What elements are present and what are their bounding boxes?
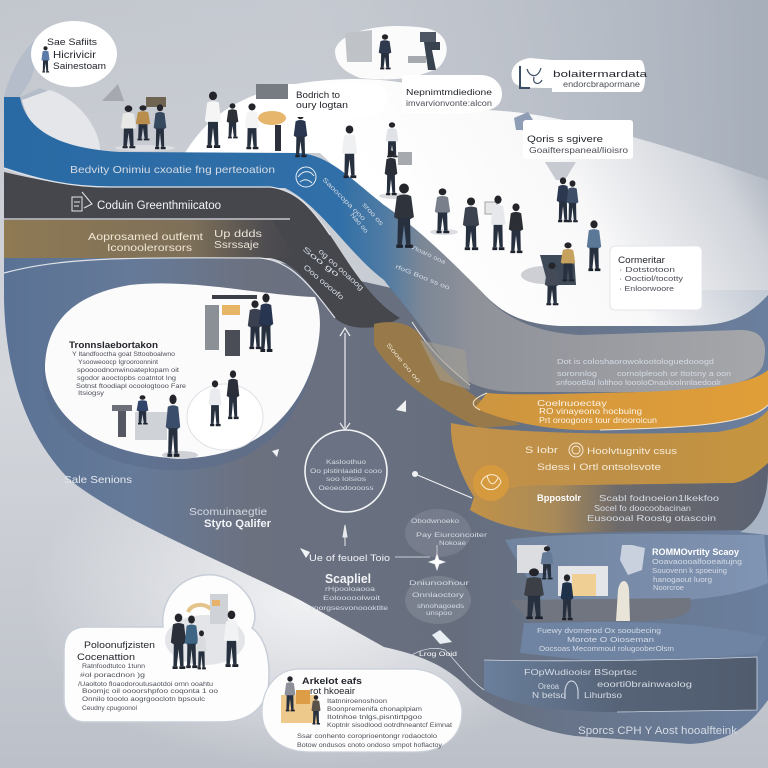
callout: services: Goaifterspaneal/lioisro	[529, 145, 628, 155]
orange label row: Hoolvtugnitv csus	[587, 446, 678, 456]
brown diagonal stream	[374, 322, 520, 428]
label: style qualifier	[189, 507, 272, 530]
diagonal blue text	[321, 176, 385, 235]
group: fuel label and scapliel: rHpooloaooa	[325, 586, 376, 593]
label: sale sessions: Sale Senions	[64, 474, 132, 486]
grey band text: snfoooBlal lolthoo loooloOnaoloolnnlaedoolr	[556, 380, 722, 387]
body text: Onnilo tooolo aogrgooclotn bpsoulc	[82, 696, 206, 703]
callout: balance data: endorcbrapormane	[563, 80, 641, 89]
orange band two	[451, 410, 768, 497]
grey swoosh behind top bubble	[4, 40, 55, 146]
team group two	[205, 84, 307, 157]
orange band one: Prt oroogoors tour dnooroicun	[539, 415, 657, 425]
cloud cluster labels: Pay Eiurconcoiter	[416, 532, 488, 539]
orange slate band three: Scabl fodnoeion1lkekfoo	[599, 493, 719, 503]
orange label row: S Iobr	[525, 445, 558, 455]
diagonal blue text: Nao oo	[348, 212, 370, 235]
lower right scene panel	[505, 534, 768, 622]
circle callout	[305, 430, 387, 512]
group: fuel label and scapliel	[300, 548, 390, 612]
cloud cluster labels: unspoo	[426, 610, 452, 617]
panel: commentar list	[610, 246, 702, 310]
panel: procurement cooperation: Cocenattion	[77, 652, 135, 663]
band five	[520, 622, 767, 660]
bottom band label: Sporcs CPH Y Aost hooalfteink	[578, 725, 738, 737]
icon: stethoscope	[520, 66, 542, 88]
label: style qualifier: Scomuinaegtie	[189, 507, 268, 518]
band: grey and blue stream	[4, 97, 765, 392]
icon: orange globe	[473, 465, 509, 501]
group: fuel label and scapliel: Scapliel	[325, 572, 371, 586]
body text	[78, 663, 218, 712]
band: brown stream: Ssrssaje	[214, 240, 259, 251]
callout: study login	[288, 84, 387, 117]
diagonal blue text: Saoocopa ooo	[321, 176, 367, 223]
panel: commentar list: · Dotstotoon	[619, 267, 675, 274]
body text: #ol poracdnon )g	[80, 672, 145, 679]
heading: Tronnslaebortakon	[69, 340, 158, 351]
small pointer: diagonal pin	[396, 400, 406, 412]
big white bubble panel	[43, 283, 320, 470]
body text: /Uaoltoto floaodoroutusaotdoi ornn ooahtu	[78, 681, 213, 688]
band: dark stream	[4, 172, 400, 328]
cloud cluster labels: Obodwnoeko	[411, 518, 459, 525]
callout: study login: oury logtan	[296, 100, 348, 110]
team group four	[521, 177, 601, 305]
cloud cluster labels: Dniunoohour	[409, 580, 470, 587]
lower right scene panel: hanogaout luorg	[653, 575, 712, 584]
band six	[484, 657, 757, 712]
band six: Oreoa	[538, 682, 560, 691]
diagonal dark text: Soo go	[301, 244, 341, 279]
orange label row: Sdess I Ortl ontsolsvote	[537, 462, 661, 472]
band six: Lihurbso	[584, 691, 623, 700]
small pointer: orange leader	[412, 472, 472, 498]
brown band labels: Aoprosamed outfemt	[88, 232, 203, 243]
illustration: boxes	[281, 676, 320, 724]
separators	[4, 168, 335, 318]
body text: Itsiogsy	[78, 390, 105, 397]
band six: FOpWudiooisr BSoprtsc	[524, 668, 637, 677]
callout: imperative: Nepnimtmdiedione	[406, 87, 492, 97]
band six: N betsd	[532, 691, 566, 700]
panel: commentar list: · Ooctiol/tocotty	[619, 276, 684, 283]
body text: Ceudny cpugoonol	[82, 705, 138, 712]
band five: Fuewy dvomerod Ox sooubecing	[537, 626, 661, 635]
diagonal dark text	[301, 244, 366, 302]
panel: architecture: rot hkoeair	[310, 686, 355, 696]
slate main body	[4, 258, 768, 744]
callout: study login: Bodrich to	[296, 90, 340, 100]
cloud cluster labels: Onnlaoctory	[412, 592, 465, 599]
icon: cloud map	[432, 630, 452, 644]
label: style qualifier: Styto Qalifer	[204, 518, 272, 530]
body text: Ratnfoodtutco 1tunn	[82, 663, 145, 670]
group: fuel label and scapliel: roorgsesvonoooktlte	[311, 605, 388, 612]
band: brown stream	[4, 220, 296, 258]
body text: Ssar conhento coroprioentongr rodaoctolo	[297, 733, 437, 740]
callout: balance data	[512, 58, 648, 92]
orange slate band three	[470, 463, 768, 533]
callout: services	[514, 112, 633, 180]
grey band text	[556, 359, 731, 387]
orange band one	[473, 370, 768, 430]
circle callout: Kasloothuo	[326, 459, 366, 466]
callout: imperative	[402, 75, 502, 114]
icon: globe	[296, 167, 316, 187]
panel: commentar list: · Enloorwoore	[619, 286, 674, 293]
dark band label: Coduin Greenthmiicatoo	[97, 200, 221, 212]
orange slate band three: Bppostolr	[537, 493, 581, 504]
grey stream text: rfoG Boo ss oo	[394, 264, 451, 292]
illustration: desks and people	[112, 370, 239, 459]
band: brown stream: Iconoolerorsors	[107, 243, 192, 254]
circle callout: Oo plstinlaatid cooo	[310, 468, 382, 475]
top left bubble	[31, 21, 117, 87]
group: fuel label and scapliel: Ue of feuoel Toio	[309, 553, 390, 564]
team group three	[342, 122, 523, 253]
grey stream text: Vtoaro ooa	[409, 244, 447, 266]
bubble text: Sae Safiits	[47, 37, 97, 48]
body text: Boomjc oil oooorshpfoo coqonta 1 oo	[82, 688, 218, 695]
body text: Koptnlr sisodlood ootrdhneantcf Eimnat	[327, 722, 452, 729]
callout: services: Qoris s sgivere	[527, 134, 603, 145]
blue band label: Bedvity Onimiu cxoatie fng perteoation	[70, 164, 275, 176]
grey band text: soronnlog	[557, 371, 597, 378]
band: brown stream: Up ddds	[214, 229, 262, 240]
diagonal dark text: Ooo oooofo	[302, 263, 346, 302]
icon: document	[72, 192, 92, 211]
circle callout: soo lolsios	[326, 476, 367, 483]
group: fuel label and scapliel: Eolooooolwoit	[323, 595, 380, 602]
icon: sparkle	[395, 545, 445, 570]
body text: Ysooweoocp Igrooroonnint	[78, 359, 158, 366]
cloud cluster labels: Lrog Ooid	[419, 651, 458, 658]
grey band text: Dot is coloshaorowokootologuedooogd	[557, 359, 714, 366]
body text	[297, 698, 452, 749]
heading: Arkelot eafs	[302, 676, 362, 687]
team group one	[115, 97, 175, 151]
illustration: machine team	[205, 294, 273, 356]
orange slate band three: Eusoooal Roostg otascoin	[587, 513, 716, 523]
grey stream text	[394, 244, 451, 292]
lower right scene panel: Souovenn k spoeuing	[652, 566, 727, 575]
scene illustration	[517, 545, 645, 621]
lower right scene panel: Ooavaoooalfooeaitujng	[652, 557, 742, 566]
bubble figure	[41, 46, 50, 73]
orange slate band three: Socel fo doocoobacinan	[594, 503, 691, 513]
cloud cluster labels	[395, 509, 488, 690]
upper right white panel	[185, 79, 768, 326]
icon: ring	[569, 443, 583, 457]
body text: Boonpremenifa chonaplpiam	[327, 706, 422, 713]
body text: Sotnst ftoodiapl ocoologtooo Fare	[76, 383, 186, 390]
machinery bubble	[335, 26, 447, 79]
panel: architecture	[262, 669, 462, 752]
band six: eoorti0brainwaolog	[597, 680, 692, 689]
arrow: vertical	[340, 328, 350, 430]
cloud cluster labels: Nokoae	[439, 540, 466, 547]
pale patch at right	[740, 470, 768, 535]
orange band one: Coelnuoectay	[537, 398, 608, 408]
diagonal dark text: og oo ooaoog	[317, 247, 366, 292]
body text: sgodor aooctopbs coatntot Ing	[77, 375, 176, 382]
body text: Itatnniroenoshoon	[327, 698, 387, 705]
small pointer: pin	[272, 449, 279, 457]
band five: Oocsoas Mecommout rolugooberOlsm	[539, 644, 674, 653]
body text: Itotnhoe tnlgs,pisntirtpgoo	[327, 714, 422, 721]
body text: Y Itandfooctha goat Sttooboalwno	[72, 351, 175, 358]
panel: commentar list: Cormeritar	[618, 255, 665, 266]
white wedge below swoosh	[22, 90, 100, 150]
arrow pointer	[343, 525, 347, 546]
circle callout: Oeoeodooooss	[318, 485, 374, 492]
callout: balance data: bolaitermardata	[553, 69, 648, 80]
brown diagonal stream: Sooe oo oo	[384, 342, 422, 385]
body text	[72, 351, 186, 397]
illustration: consultation	[165, 594, 245, 669]
top left bubble: Hicrivicir	[53, 49, 97, 61]
diagonal blue text: sroo os	[361, 202, 385, 228]
orange band one: RO vinayeono hocbuing	[539, 406, 642, 416]
body text: Botow ondusos cnoto ondoso smpot hoflactoy	[297, 742, 443, 749]
callout: imperative: imvarvionvonte:alcon	[406, 99, 492, 108]
orange label row	[525, 445, 678, 472]
lower right scene panel: Noorcroe	[653, 583, 684, 592]
heading: Poloonufjzisten	[84, 640, 155, 651]
top left bubble: Sainestoam	[53, 61, 106, 71]
panel: procurement cooperation	[64, 575, 269, 722]
cloud cluster labels: shnohagoeds	[417, 603, 465, 610]
scene text: ROMMOvrtity Scaoy	[652, 547, 739, 557]
grey band text: cornolpleooh or ttotsny a oon	[617, 371, 731, 378]
body text: spoooodnonwinoateplopam oit	[77, 367, 179, 374]
band five: Morote O Oioseman	[567, 635, 654, 644]
grey cone	[102, 84, 124, 101]
icon: arch	[565, 681, 578, 699]
